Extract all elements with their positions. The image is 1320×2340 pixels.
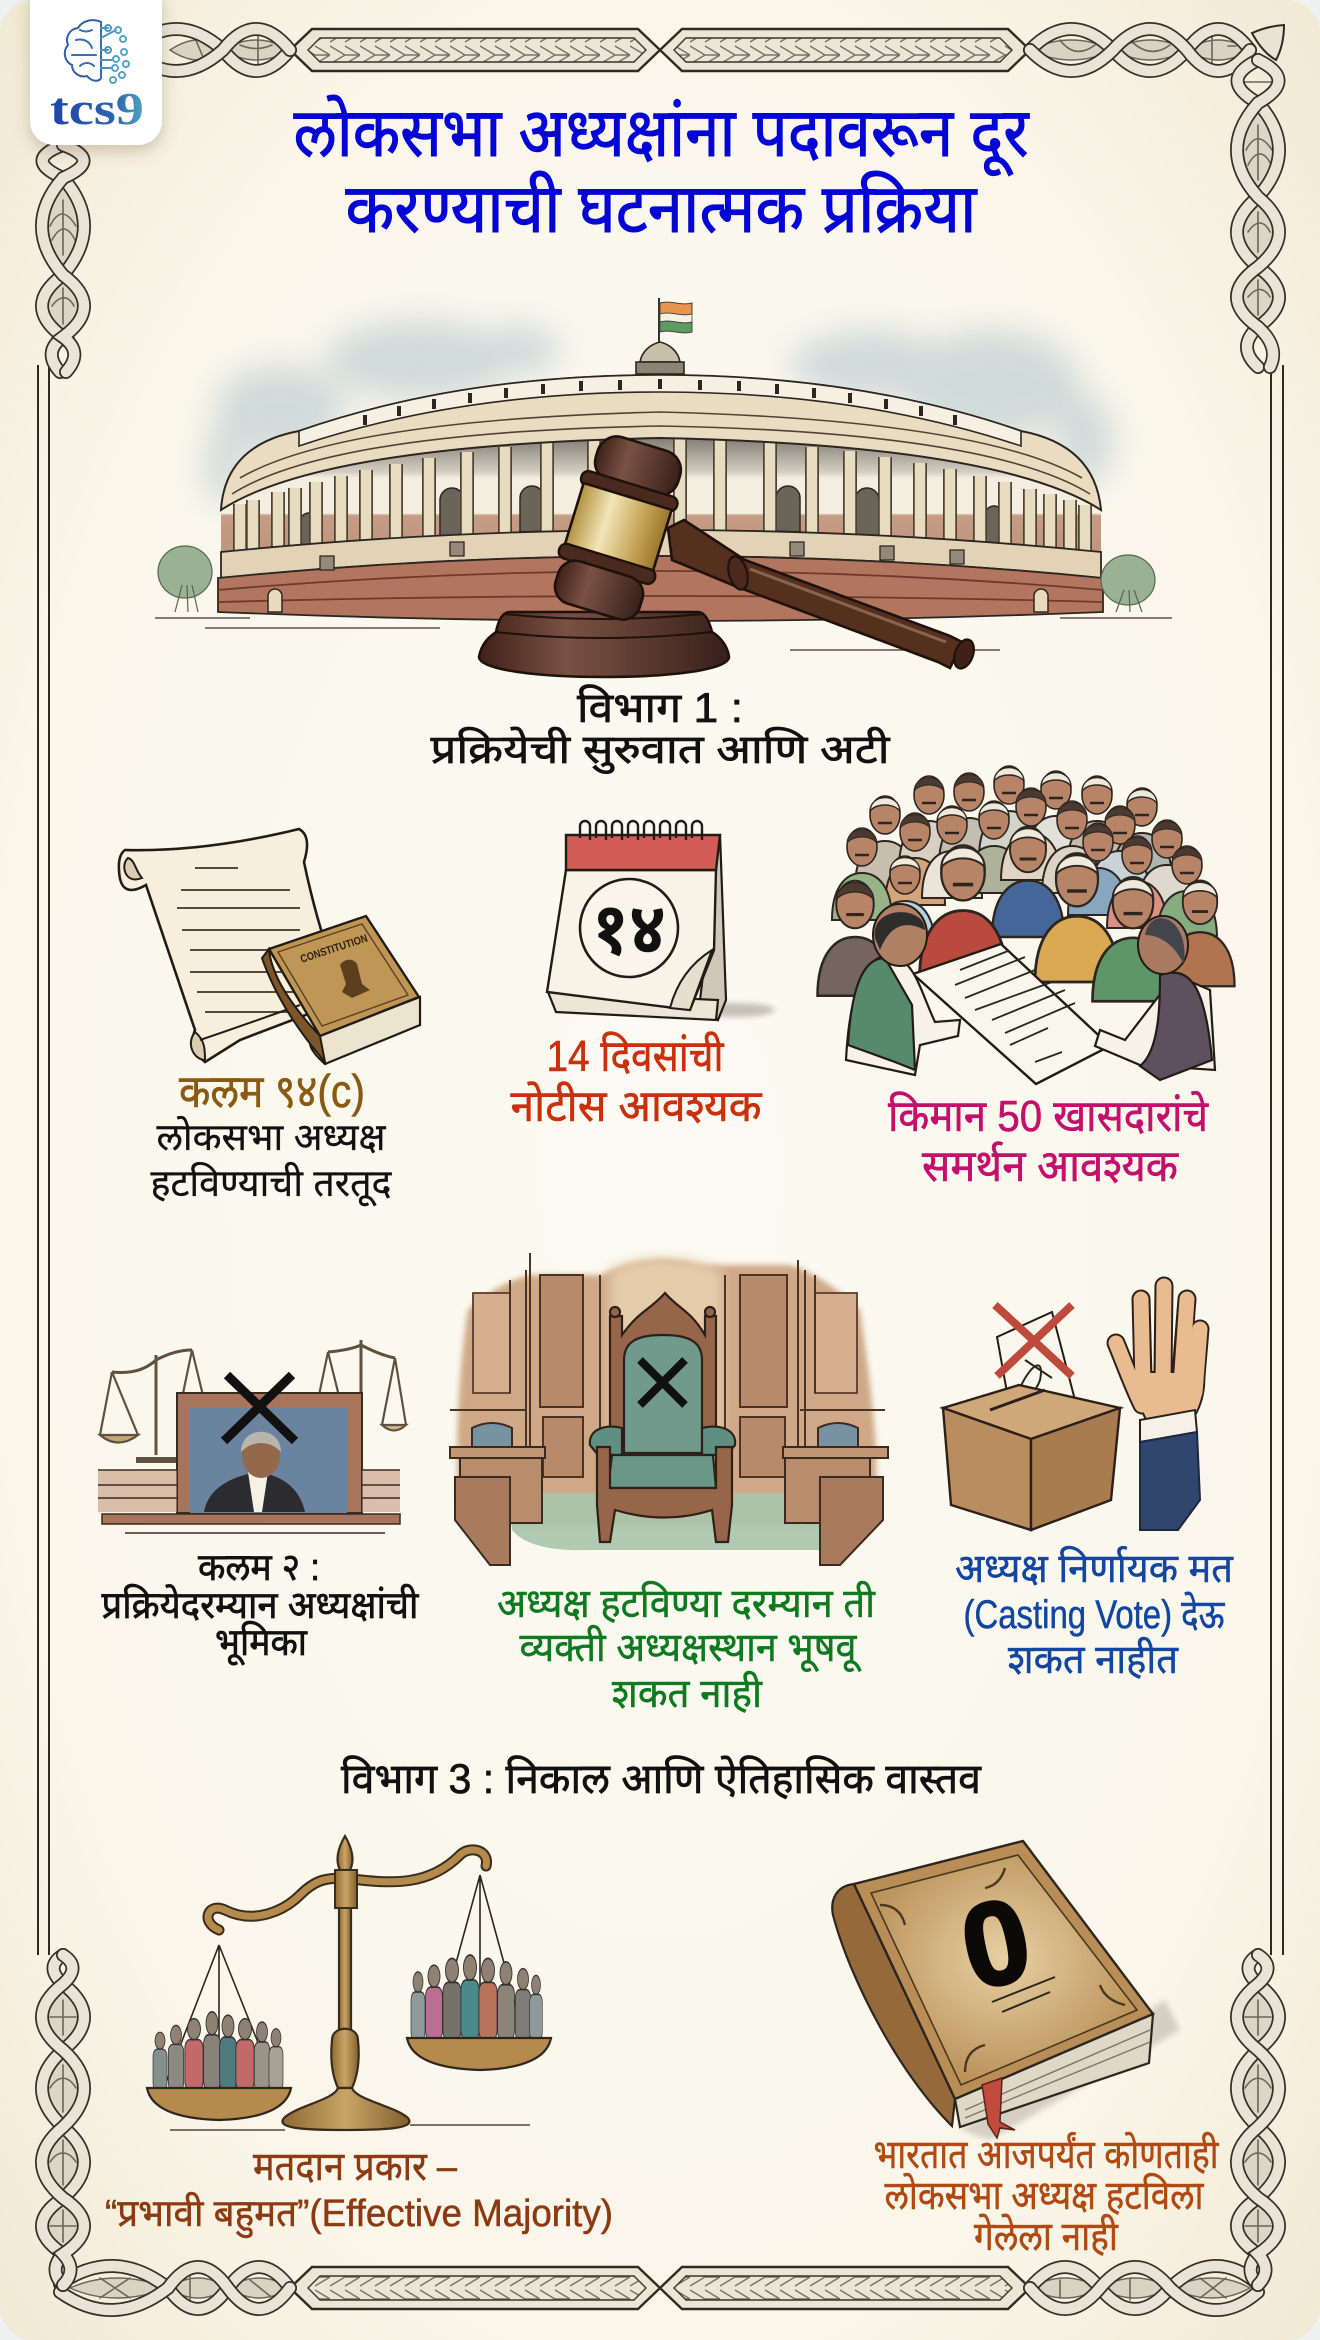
label: 14 days notice [510, 1031, 763, 1131]
line 3: गेलेला नाही [974, 2214, 1119, 2259]
constitution book [262, 916, 420, 1064]
date circle [580, 879, 678, 977]
back rows [832, 766, 1217, 948]
frame: bottom left vine [42, 1955, 84, 2285]
icon: desk calendar 14 [547, 821, 775, 1020]
green floor [512, 1493, 825, 1550]
petition paper [913, 944, 1110, 1084]
frame: top left vine [42, 145, 84, 372]
section 3 heading: विभाग 3 : निकाल आणि ऐतिहासिक वास्तव [341, 1755, 982, 1802]
left people [153, 2012, 283, 2090]
frame: side rules [38, 365, 1283, 1955]
line 1: 14 दिवसांची [546, 1031, 725, 1081]
cover corner ornaments [880, 1868, 1125, 2072]
label: never removed in India [874, 2132, 1219, 2259]
line 2: प्रक्रियेदरम्यान अध्यक्षांची [102, 1583, 420, 1627]
stand [282, 1836, 409, 2130]
ballot paper [997, 1312, 1075, 1420]
sleeve [1140, 1432, 1200, 1530]
title line 2: करण्याची घटनात्मक प्रक्रिया [346, 171, 978, 247]
chair [590, 1293, 735, 1542]
label body line 2: हटविण्याची तरतूद [150, 1161, 392, 1207]
label: no casting vote [955, 1546, 1234, 1682]
chair arms and seat [590, 1427, 735, 1455]
wood backdrop [450, 1253, 885, 1525]
blue panel [190, 1408, 347, 1513]
chair frame [610, 1293, 716, 1445]
left scale [100, 1350, 206, 1460]
left strings [165, 1945, 275, 2090]
logo card [30, 0, 162, 145]
line 1: अध्यक्ष निर्णायक मत [955, 1546, 1234, 1591]
chair back [624, 1335, 702, 1453]
line 1: मतदान प्रकार – [253, 2145, 458, 2189]
courtroom back panel [177, 1393, 362, 1513]
right people [411, 1955, 542, 2040]
title line 1: लोकसभा अध्यक्षांना पदावरून दूर [294, 95, 1030, 176]
cover rules [992, 1977, 1055, 2012]
right strings [435, 1875, 525, 2040]
beam [208, 1850, 487, 1930]
zero: 0 [950, 1873, 1042, 2015]
label: support of 50 MPs [888, 1090, 1209, 1191]
cross mark [224, 1375, 295, 1441]
heading line 1: विभाग 1 : [577, 684, 743, 731]
ballot box [943, 1385, 1120, 1530]
label: article 94(c) [150, 1065, 392, 1207]
line 3: भूमिका [215, 1620, 308, 1666]
line 1: भारतात आजपर्यंत कोणताही [874, 2132, 1219, 2177]
signer left [846, 904, 960, 1075]
desk [98, 1470, 400, 1533]
line 2: व्यक्ती अध्यक्षस्थान भूषवू [520, 1625, 862, 1672]
line 2: नोटीस आवश्यक [510, 1081, 763, 1131]
ground line [155, 618, 1172, 650]
cover [854, 1841, 1153, 2099]
frame: top band [130, 25, 1284, 71]
line 2: (Casting Vote) देऊ [964, 1592, 1225, 1637]
trees [158, 546, 1155, 612]
colonnade [221, 438, 1101, 552]
illustration: parliament building with gavel [155, 298, 1172, 677]
illustration: speaker chair with cross [450, 1253, 888, 1565]
line 1: किमान 50 खासदारांचे [888, 1090, 1209, 1141]
book title: CONSTITUTION [299, 933, 369, 966]
cross mark [640, 1360, 685, 1405]
label: speaker cannot preside [497, 1581, 876, 1716]
illustration: judge with cross [98, 1340, 406, 1533]
line 1: कलम २ : [198, 1547, 320, 1589]
label: article 2 judge role [102, 1547, 420, 1666]
illustration: balance scale with people [147, 1836, 551, 2130]
national emblem [340, 960, 370, 998]
right scale [318, 1340, 406, 1460]
frame: bottom right vine [1237, 1955, 1279, 2285]
judge [204, 1432, 305, 1512]
front row [818, 845, 1234, 1001]
label: vote type effective majority [105, 2145, 613, 2239]
line 3: शकत नाहीत [1008, 1637, 1179, 1682]
frame: bottom band [60, 2266, 1258, 2310]
flag on dome [659, 298, 692, 345]
left pan [147, 2088, 291, 2120]
ground shadow [170, 2125, 530, 2130]
icon: brain circuit [65, 20, 129, 83]
icon: scroll and constitution book [119, 829, 420, 1064]
ribbon [982, 2078, 1015, 2138]
title [294, 95, 1030, 247]
line 1: अध्यक्ष हटविण्या दरम्यान ती [497, 1581, 876, 1626]
frame: top right vine [1237, 60, 1279, 367]
hand [1116, 1286, 1204, 1420]
ballot mark [1020, 1360, 1052, 1393]
roof [221, 375, 1101, 510]
book shadow [960, 2000, 1180, 2140]
logo wordmark: tcs9 [50, 83, 144, 134]
spine [832, 1884, 955, 2126]
beam hub [335, 1870, 357, 1908]
label body line 1: लोकसभा अध्यक्ष [156, 1115, 386, 1159]
gavel head [545, 429, 692, 626]
red cross [995, 1305, 1072, 1376]
illustration: group of MPs signing [818, 766, 1234, 1084]
line 2: लोकसभा अध्यक्ष हटविला [884, 2173, 1204, 2218]
signer right [1095, 916, 1215, 1080]
watercolor clouds [205, 320, 1113, 505]
gavel handle [668, 520, 978, 671]
illustration: book with zero [832, 1841, 1180, 2140]
scroll [119, 829, 345, 1062]
date number: १४ [592, 889, 666, 969]
lower band and brick base [218, 530, 1103, 621]
heading line 2: प्रक्रियेची सुरुवात आणि अटी [430, 727, 890, 773]
side benches [450, 1423, 888, 1565]
pages [955, 2014, 1153, 2127]
shirt cuff [1140, 1410, 1197, 1442]
label heading: कलम ९४(c) [179, 1065, 365, 1117]
line 2: समर्थन आवश्यक [922, 1141, 1179, 1191]
dome [636, 342, 684, 374]
line 2: “प्रभावी बहुमत”(Effective Majority) [105, 2191, 613, 2239]
gavel base [479, 612, 990, 677]
right pan [407, 2038, 551, 2070]
line 3: शकत नाही [612, 1671, 763, 1716]
section 1 heading [430, 684, 890, 773]
illustration: ballot box and raised hand [943, 1286, 1204, 1530]
